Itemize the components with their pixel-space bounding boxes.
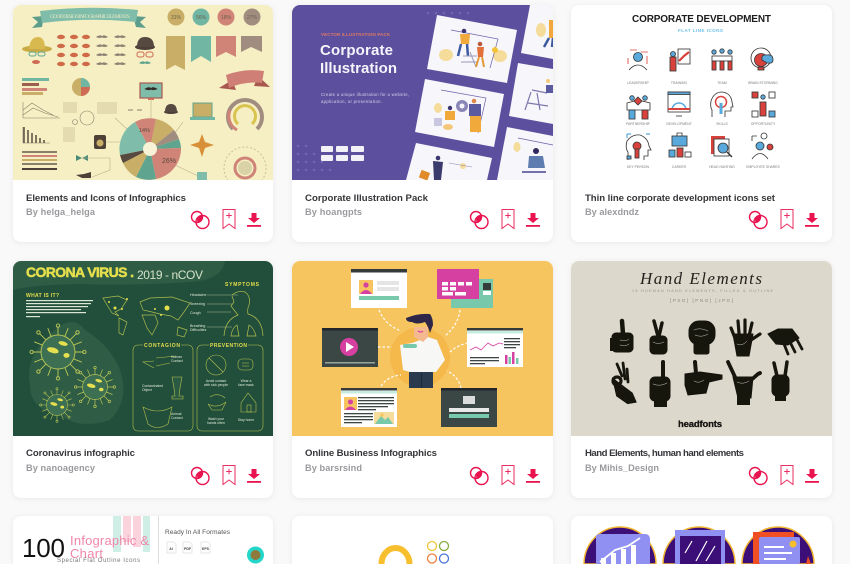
card title: Hand Elements, human hand elements — [585, 448, 744, 459]
yellow ring — [382, 548, 410, 564]
monitor with moustache — [140, 83, 162, 100]
percentage badges: 18% — [221, 15, 232, 21]
card title: Coronavirus infographic — [26, 448, 136, 459]
lips grid — [57, 35, 90, 66]
chart stripes background — [113, 516, 159, 564]
icon grid — [626, 48, 775, 160]
card author: By helga_helga — [26, 207, 96, 217]
card author: By hoangpts — [305, 207, 362, 217]
card: donut chart set — [292, 516, 553, 564]
pink headline: Infographic & — [70, 533, 149, 548]
symptoms — [190, 282, 263, 336]
stacked lines — [22, 151, 57, 170]
prevention panel: Stay home — [238, 418, 254, 422]
caption: Special Flat Outline Icons — [57, 558, 140, 564]
thumbnail: corporate illustration: Illustration — [320, 60, 397, 77]
moustaches grid — [96, 35, 126, 65]
thumbnail: hand elements — [571, 261, 832, 436]
card: Hand Elements — [571, 261, 832, 498]
hand icons — [610, 320, 802, 407]
headline: Hand Elements — [639, 269, 762, 288]
thumbnail: retro infographic elements — [13, 5, 273, 189]
window: analytics chart — [467, 328, 523, 367]
dot patterns — [297, 12, 469, 171]
world map — [103, 296, 190, 337]
small rings — [428, 542, 448, 563]
hand: fist — [689, 321, 715, 354]
hat, laptop and compass — [128, 103, 215, 157]
icon: download — [526, 213, 540, 227]
icon captions: SKILLS — [716, 122, 728, 126]
icon: development — [668, 92, 690, 116]
icon: download — [247, 213, 261, 227]
icon: brain storming — [751, 48, 773, 70]
illustration: right column — [514, 20, 553, 172]
prevention panel — [197, 343, 263, 431]
card: 100 Infographic and Chart — [13, 516, 273, 564]
icon: leadership — [628, 50, 648, 70]
icon captions: EMPLOYEE SHARES — [746, 165, 781, 169]
format file icons: EPS — [202, 547, 210, 551]
hand: peace — [772, 362, 789, 401]
heading: CORPORATE DEVELOPMENT — [632, 14, 771, 25]
dashed connectors — [378, 310, 468, 388]
prevention panel: with sick people — [204, 383, 228, 387]
icon: bookmark — [223, 466, 235, 484]
icon: opportunity — [752, 92, 775, 117]
icon captions: DEVELOPMENT — [666, 122, 692, 126]
virus illustrations — [30, 324, 116, 422]
thumbnail: corona virus infographic: 2019 - nCOV — [137, 268, 203, 282]
icon captions — [626, 81, 781, 169]
hand: fingers crossed — [650, 321, 667, 354]
contagion panel — [133, 343, 193, 431]
title ribbon: GOOD DESIGN INFOGRAPHIC ELEMENTS — [50, 14, 130, 20]
percentage badges — [168, 8, 260, 26]
small pie — [72, 78, 90, 96]
title ribbon — [32, 8, 146, 28]
card: Online Business Infographics — [292, 261, 553, 498]
icon: compare — [470, 212, 488, 228]
card title: Corporate Illustration Pack — [305, 193, 429, 204]
hat and glasses figures — [22, 37, 155, 64]
background blobs — [13, 261, 225, 424]
camera, tie and pipe — [76, 135, 106, 178]
percentage badges: 56% — [196, 15, 207, 21]
icon: bookmark — [781, 210, 793, 228]
file formats: [PSD] [PNG] [JPG] — [670, 298, 733, 303]
icon: bookmark — [223, 210, 235, 228]
icon: team — [712, 49, 732, 70]
headline: CORONA VIRUS . — [26, 264, 134, 280]
subhead: 15 HUEMAN HAND ELEMENTS, FILLED & OUTLINE — [632, 289, 773, 293]
format file icons: PDF — [184, 547, 192, 551]
teal badge — [247, 546, 264, 564]
window: profile article — [341, 388, 397, 427]
card author: By alexdndz — [585, 207, 639, 217]
hand: rock horns — [728, 362, 760, 405]
format file icons: AI — [169, 547, 173, 551]
hand: pointing sideways — [685, 362, 722, 395]
icon: key person — [626, 134, 651, 160]
window: email signup — [441, 388, 497, 427]
connector lines — [82, 99, 198, 177]
donut gauge — [228, 100, 262, 130]
icon: compare — [470, 468, 488, 484]
prevention panel: Wear a — [241, 379, 252, 383]
icon: compare — [192, 212, 209, 228]
card title: Thin line corporate development icons set — [585, 193, 776, 204]
thumbnail: corporate illustration: application, or presentation. — [321, 99, 382, 104]
hand: thumbs up — [610, 321, 633, 352]
icon: head hunting — [711, 136, 732, 157]
window: profile form — [351, 269, 407, 308]
icon: bookmark — [781, 466, 793, 484]
icon: compare — [750, 468, 767, 484]
window: video player — [322, 328, 378, 367]
icon: download — [805, 213, 819, 227]
illustration: businessman — [419, 156, 472, 180]
eyebrow: VECTOR ILLUSTRATION PACK — [321, 32, 391, 37]
contagion panel: Contact — [171, 359, 183, 363]
icon captions: CAREER — [672, 165, 687, 169]
card title: Elements and Icons of Infographics — [26, 193, 186, 204]
thumbnail: corona virus infographic — [13, 261, 273, 436]
small ribbon — [219, 70, 270, 90]
card title: Online Business Infographics — [305, 448, 437, 459]
card: purple badge icons — [571, 516, 832, 564]
card: Corporate Illustration Pack — [292, 5, 553, 242]
prevention panel: face mask — [238, 383, 254, 387]
hand: open palm — [731, 320, 760, 356]
prevention panel: Wash your — [208, 417, 225, 421]
main pie chart: 26% — [162, 158, 176, 165]
hanging flags — [166, 36, 262, 70]
icon captions: OPPORTUNITY — [751, 122, 776, 126]
icon: compare — [192, 468, 209, 484]
contagion panel: Animal — [171, 412, 182, 416]
card author: By Mihis_Design — [585, 463, 659, 473]
card: 100 Infographic and Chart: Chart — [70, 546, 103, 561]
contagion panel: Human — [171, 355, 182, 359]
contagion panel: Contact — [171, 416, 183, 420]
what is it text: WHAT IS IT? — [26, 293, 59, 299]
icon: career — [669, 133, 691, 157]
hand: pinch — [768, 329, 802, 354]
icon captions: BRAIN STORMING — [748, 81, 778, 85]
brand wordmark: headfonts — [678, 419, 722, 430]
prevention panel: hands often — [207, 421, 225, 425]
prevention panel: PREVENTION — [210, 343, 247, 349]
hand: OK sign — [613, 363, 634, 402]
horizontal bars — [22, 78, 49, 95]
percentage badges: 27% — [247, 15, 258, 21]
icon captions: KEY PERSON — [627, 165, 650, 169]
icon captions: TEAM — [717, 81, 727, 85]
card: Thin line corporate development icons set — [571, 5, 832, 242]
badge: growth chart — [584, 527, 656, 564]
description: Create a unique illustration for a website, — [321, 92, 409, 97]
main pie chart — [119, 118, 181, 180]
thumbnail: online business — [292, 261, 553, 436]
icon captions: HEAD HUNTING — [709, 165, 735, 169]
symptoms: Headache — [190, 293, 206, 297]
prevention panel: Avoid contact — [206, 379, 226, 383]
icon: compare — [750, 212, 767, 228]
illustration: meeting — [434, 90, 486, 133]
icon captions: LEADERSHIP — [627, 81, 649, 85]
symptoms: Cough — [190, 311, 201, 315]
slide panels — [406, 5, 553, 180]
symptoms: SYMPTOMS — [225, 282, 260, 288]
icon captions: TRAINING — [671, 81, 687, 85]
format chips — [321, 146, 364, 161]
illustration: workers on ladder — [439, 29, 507, 68]
card author: By nanoagency — [26, 463, 96, 473]
main pie chart: 14% — [139, 128, 150, 134]
icon: bookmark — [502, 466, 514, 484]
card: Coronavirus infographic — [13, 261, 273, 498]
contagion panel: Object — [142, 388, 152, 392]
divider subheading: FLAT LINE ICONS — [678, 28, 723, 33]
contagion panel: Contaminated — [142, 384, 163, 388]
icon: download — [805, 469, 819, 483]
icon: download — [526, 469, 540, 483]
line charts and bars — [23, 102, 94, 143]
halo behind person — [390, 327, 450, 387]
badge: tablet — [663, 527, 735, 564]
card author: By barsrsind — [305, 463, 362, 473]
symptoms: Sneezing — [190, 302, 205, 306]
dotted ring chart — [224, 146, 266, 180]
icon captions: PARTNERSHIP — [626, 122, 651, 126]
big number: 100 — [22, 533, 65, 563]
icon: skills — [711, 92, 733, 117]
icon: training — [670, 49, 690, 71]
small dotted tables — [63, 102, 117, 142]
icon: bookmark — [502, 210, 514, 228]
icon: download — [247, 469, 261, 483]
window: keypad cards — [437, 269, 493, 308]
contagion panel: CONTAGION — [144, 343, 180, 349]
outbreak dots — [108, 298, 170, 316]
symptoms: Breathing — [190, 324, 205, 328]
icon: partnership — [627, 96, 650, 119]
percentage badges: 31% — [171, 15, 182, 21]
hand: pointing up — [650, 362, 670, 407]
format file icons — [167, 542, 210, 553]
card: Elements and Icons of Infographics — [13, 5, 273, 242]
icon: employee shares — [752, 133, 773, 159]
formats heading: Ready In All Formates — [165, 529, 231, 536]
thumbnail: corporate illustration — [292, 5, 553, 180]
headline: Corporate — [320, 42, 393, 59]
person illustration — [400, 314, 445, 388]
device — [197, 172, 207, 180]
badge: document — [742, 527, 814, 564]
symptoms: Difficulties — [190, 328, 207, 332]
